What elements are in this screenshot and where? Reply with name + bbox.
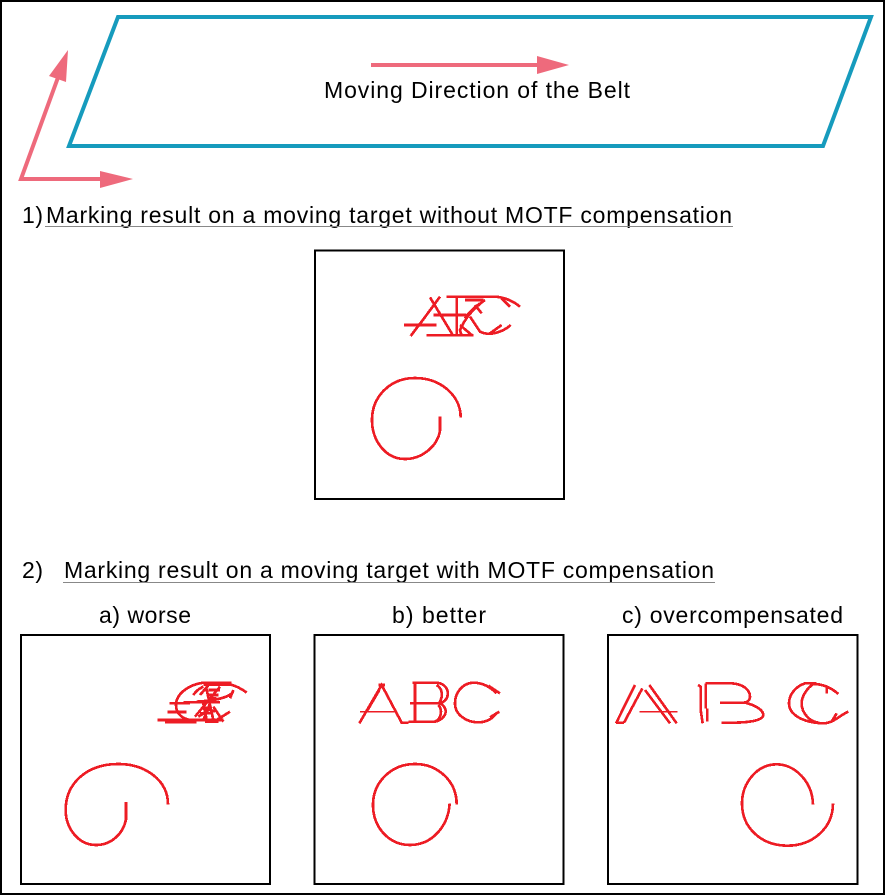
conveyor belt parallelogram — [69, 17, 871, 146]
ABC marking — [616, 683, 848, 723]
spiral circle marking — [372, 378, 461, 459]
scrambled ABC marking — [157, 683, 247, 722]
scrambled ABC marking — [404, 297, 520, 336]
arrow: belt moving direction — [371, 56, 569, 74]
spiral circle marking — [66, 764, 168, 845]
circle marking — [373, 764, 457, 845]
panel c: overcompensated — [608, 635, 858, 884]
panel 1: without compensation — [315, 250, 564, 499]
heading 1: 1) — [22, 202, 43, 228]
panel a: worse — [21, 635, 270, 884]
label c: c) overcompensated — [622, 602, 843, 628]
heading 2: Marking result on a moving target with MOTF compensation — [64, 557, 714, 583]
ABC marking — [359, 683, 500, 723]
heading 2: 2) — [22, 557, 43, 583]
belt label: Moving Direction of the Belt — [324, 77, 631, 103]
icon: axis arrows — [21, 50, 133, 188]
panel b: better — [314, 635, 564, 884]
label b: b) better — [392, 602, 486, 628]
spiral circle marking — [742, 764, 833, 846]
heading 1: Marking result on a moving target without MOTF compensation — [46, 202, 732, 228]
label a: a) worse — [99, 602, 191, 628]
